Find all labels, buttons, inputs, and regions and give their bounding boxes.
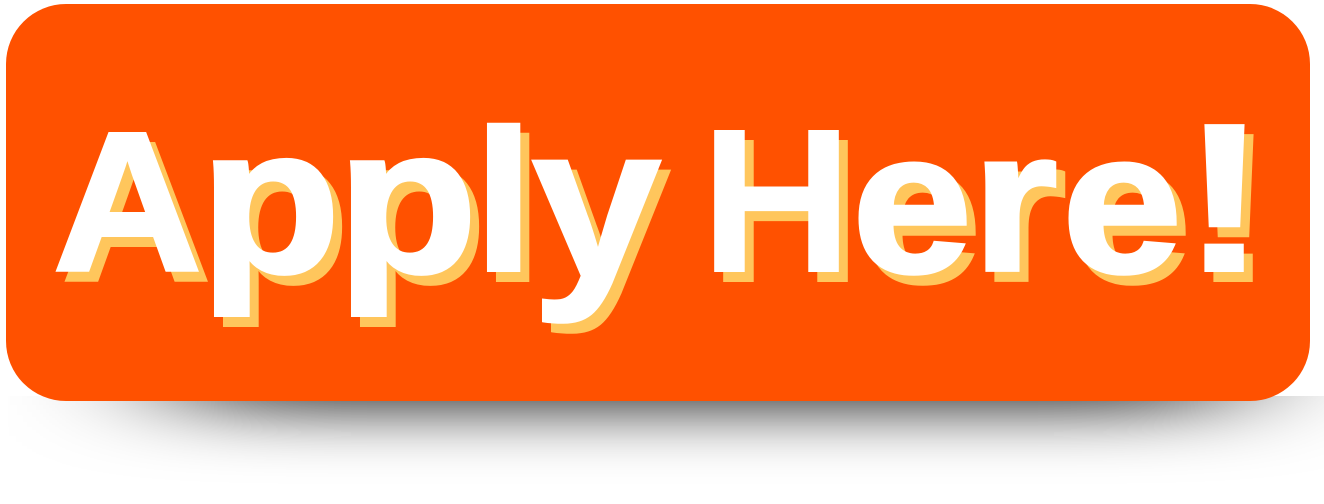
button label: Apply Here!: r [972,87,1058,313]
button label: Apply Here!: p [200,85,340,317]
button label: Apply Here!: e [1062,90,1182,315]
button label: Apply Here!: l [470,85,538,316]
button label: Apply Here!: A [53,91,202,312]
button label: Apply Here!: e [852,90,972,315]
button background [6,4,1310,401]
button label: Apply Here!: p [337,85,477,317]
button drop shadow [60,396,1324,461]
button label: Apply Here!: y [531,79,662,324]
button label: Apply Here! [53,77,1271,324]
button label: Apply Here!: ! [1178,77,1271,318]
button label: Apply Here!: H [700,87,853,316]
